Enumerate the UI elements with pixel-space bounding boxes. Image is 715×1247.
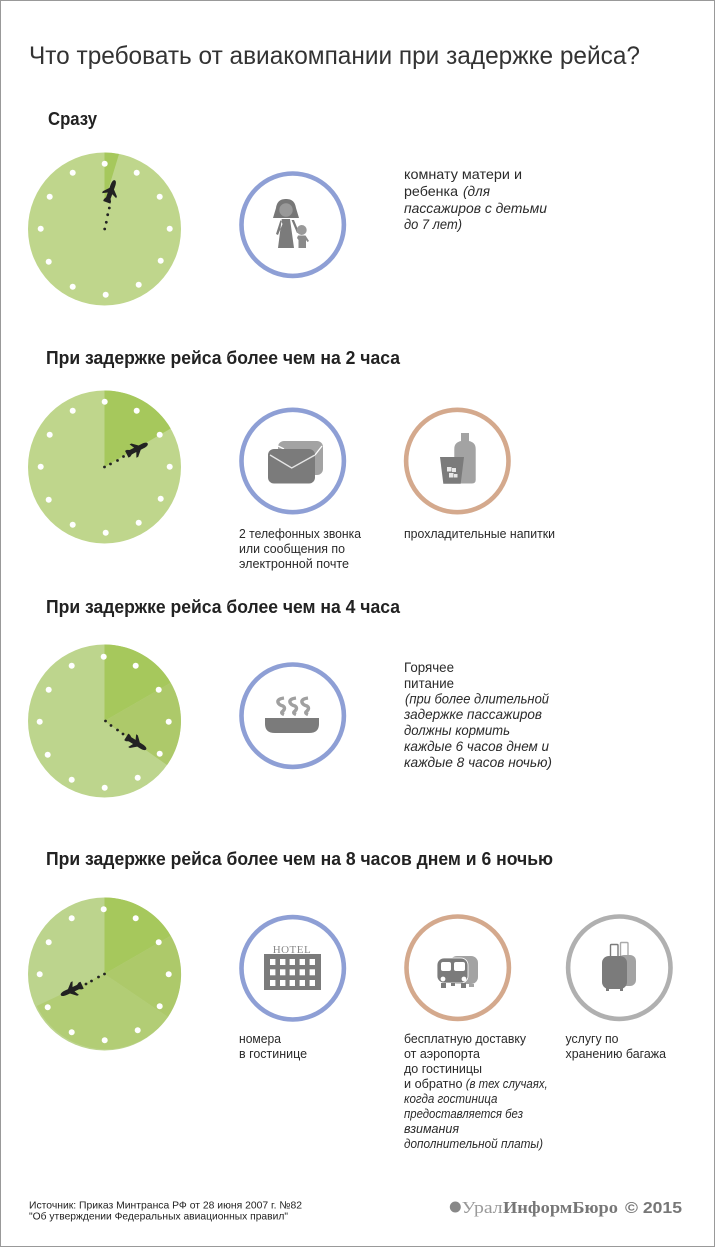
text: phone calls: или сообщения по <box>239 541 345 556</box>
icon: hotel <box>242 917 344 1020</box>
text: mother and child room: до 7 лет) <box>404 216 462 232</box>
logo and copyright: Урал <box>462 1198 503 1217</box>
text: cold drinks: прохладительные напитки <box>404 526 555 541</box>
text: mother and child room: (для <box>463 183 491 199</box>
icon: mother and child <box>242 174 344 276</box>
icon: bus <box>406 916 509 1019</box>
clock: 8 hours <box>28 898 181 1050</box>
clock: 4 hours <box>28 644 181 798</box>
text: mother and child room <box>404 166 547 232</box>
source note: "Об утверждении Федеральных авиационных правил" <box>29 1210 288 1222</box>
text: hot meal: задержке пассажиров <box>403 706 542 722</box>
text: mother and child room: пассажиров с детьми <box>404 200 547 216</box>
text: hot meal <box>403 659 552 770</box>
text: hot meal: каждые 6 часов днем и <box>404 738 549 754</box>
text: hotel rooms: в гостинице <box>239 1046 307 1061</box>
heading: 4 hours: При задержке рейса более чем на 4 часа <box>46 597 401 617</box>
title: Что требовать от авиакомпании при задержке рейса? <box>29 42 640 70</box>
text: free transfer: взимания <box>404 1121 459 1136</box>
text: phone calls <box>239 526 362 571</box>
text: free transfer: дополнительной платы) <box>404 1136 543 1151</box>
source note: Источник: Приказ Минтранса РФ от 28 июня 2007 г. №82 <box>29 1200 302 1212</box>
text: hot meal: питание <box>404 675 454 691</box>
clock: immediately <box>28 152 181 306</box>
text: free transfer: (в тех случаях, <box>466 1076 548 1091</box>
text: free transfer: когда гостиница <box>404 1091 498 1106</box>
text: free transfer: до гостиницы <box>404 1061 482 1076</box>
source note <box>29 1200 302 1222</box>
logo and copyright <box>450 1198 682 1217</box>
icon: cold drinks <box>406 410 508 512</box>
text: hot meal: Горячее <box>404 659 454 675</box>
text: luggage storage <box>566 1031 667 1061</box>
clock: 2 hours <box>28 390 181 544</box>
icon: luggage <box>568 916 670 1019</box>
heading: 2 hours: При задержке рейса более чем на 2 часа <box>46 348 401 368</box>
logo and copyright: ИнформБюро <box>503 1198 618 1217</box>
text: free transfer: бесплатную доставку <box>404 1031 526 1046</box>
text: free transfer <box>404 1031 548 1151</box>
text: free transfer: от аэропорта <box>404 1046 481 1061</box>
icon: hotel: HOTEL <box>273 944 311 956</box>
text: hotel rooms: номера <box>239 1031 282 1046</box>
text: mother and child room: ребенка <box>404 183 458 199</box>
text: hot meal: должны кормить <box>404 722 510 738</box>
icon: envelopes <box>242 410 344 512</box>
text: phone calls: электронной почте <box>239 556 349 571</box>
text: hot meal: (при более длительной <box>405 690 549 706</box>
logo and copyright: © 2015 <box>625 1200 682 1217</box>
text: luggage storage: хранению багажа <box>566 1046 667 1061</box>
text: hot meal: каждые 8 часов ночью) <box>404 754 552 770</box>
text: free transfer: и обратно <box>404 1076 462 1091</box>
heading: immediately: Сразу <box>48 109 97 129</box>
text: mother and child room: комнату матери и <box>404 166 522 182</box>
heading: 8 hours: При задержке рейса более чем на 8 часов днем и 6 ночью <box>46 849 553 869</box>
text: free transfer: предоставляется без <box>404 1106 523 1121</box>
icon: hot meal <box>242 664 344 767</box>
text: luggage storage: услугу по <box>566 1031 618 1046</box>
text: hotel rooms <box>239 1031 307 1061</box>
text: phone calls: 2 телефонных звонка <box>239 526 362 541</box>
